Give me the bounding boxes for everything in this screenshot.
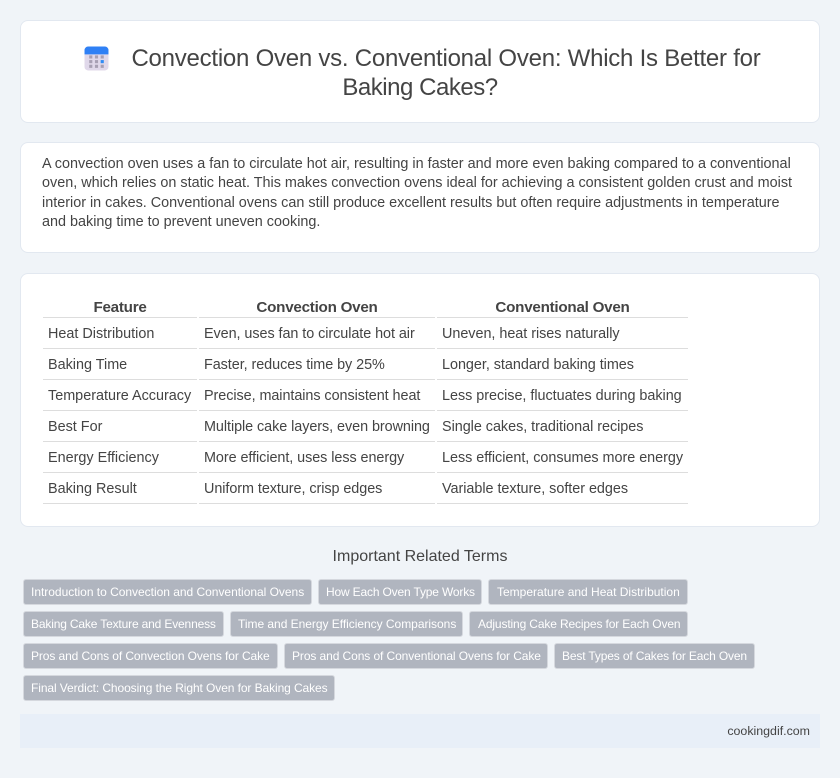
comparison table: Feature [93, 299, 147, 316]
comparison table: Best For [48, 419, 102, 435]
comparison table: Energy Efficiency [48, 450, 159, 466]
icon: calendar [84, 46, 108, 70]
comparison table: Baking Result [48, 481, 137, 497]
comparison table: Temperature Accuracy [48, 388, 191, 404]
related terms tags [23, 579, 755, 701]
footer source text: cookingdif.com [727, 724, 810, 738]
related terms heading: Important Related Terms [333, 548, 507, 565]
comparison table: Even, uses fan to circulate hot air [204, 326, 415, 342]
tag [469, 611, 688, 637]
comparison table: Longer, standard baking times [442, 357, 634, 373]
tag [23, 579, 312, 605]
tag [488, 579, 688, 605]
header panel [20, 20, 820, 123]
comparison table panel [20, 273, 820, 527]
title: Baking Cakes? [342, 74, 498, 101]
comparison table: Heat Distribution [48, 326, 154, 342]
tag: Introduction to Convection and Conventional Ovens [31, 585, 304, 599]
comparison table: Multiple cake layers, even browning [204, 419, 430, 435]
comparison table: Faster, reduces time by 25% [204, 357, 385, 373]
tag: Time and Energy Efficiency Comparisons [238, 617, 456, 631]
tag: Pros and Cons of Conventional Ovens for Cake [292, 649, 541, 663]
intro paragraph: interior in cakes. Conventional ovens can still produce excellent results but often require adjustments in temperature [42, 195, 780, 211]
comparison table: Conventional Oven [495, 299, 630, 316]
comparison table: Less efficient, consumes more energy [442, 450, 683, 466]
tag: Adjusting Cake Recipes for Each Oven [478, 617, 680, 631]
comparison table: Convection Oven [256, 299, 378, 316]
tag: How Each Oven Type Works [326, 585, 475, 599]
intro paragraph [42, 156, 792, 230]
comparison table: Precise, maintains consistent heat [204, 388, 420, 404]
tag [23, 675, 335, 701]
tag [230, 611, 463, 637]
tag [284, 643, 548, 669]
tag [23, 611, 224, 637]
tag: Temperature and Heat Distribution [497, 585, 680, 599]
comparison table: Less precise, fluctuates during baking [442, 388, 682, 404]
tag: Final Verdict: Choosing the Right Oven for Baking Cakes [31, 681, 328, 695]
comparison table: Uniform texture, crisp edges [204, 481, 382, 497]
title [131, 45, 761, 101]
tag [23, 643, 278, 669]
intro text panel [20, 142, 820, 253]
comparison table: Baking Time [48, 357, 127, 373]
tag: Baking Cake Texture and Evenness [31, 617, 216, 631]
tag [318, 579, 482, 605]
tag: Pros and Cons of Convection Ovens for Cake [31, 649, 270, 663]
comparison table: More efficient, uses less energy [204, 450, 404, 466]
footer bar [20, 714, 820, 748]
comparison table [43, 299, 688, 504]
intro paragraph: and baking time to prevent uneven cooking. [42, 214, 320, 230]
comparison table: Uneven, heat rises naturally [442, 326, 620, 342]
title: Convection Oven vs. Conventional Oven: Which Is Better for [131, 45, 761, 72]
comparison table: Single cakes, traditional recipes [442, 419, 643, 435]
tag [554, 643, 755, 669]
intro paragraph: oven, which relies on static heat. This makes convection ovens ideal for achieving a consistent golden crust and moist [42, 175, 792, 191]
intro paragraph: A convection oven uses a fan to circulate hot air, resulting in faster and more even baking compared to a conventional [42, 156, 791, 172]
comparison table: Variable texture, softer edges [442, 481, 628, 497]
tag: Best Types of Cakes for Each Oven [562, 649, 747, 663]
